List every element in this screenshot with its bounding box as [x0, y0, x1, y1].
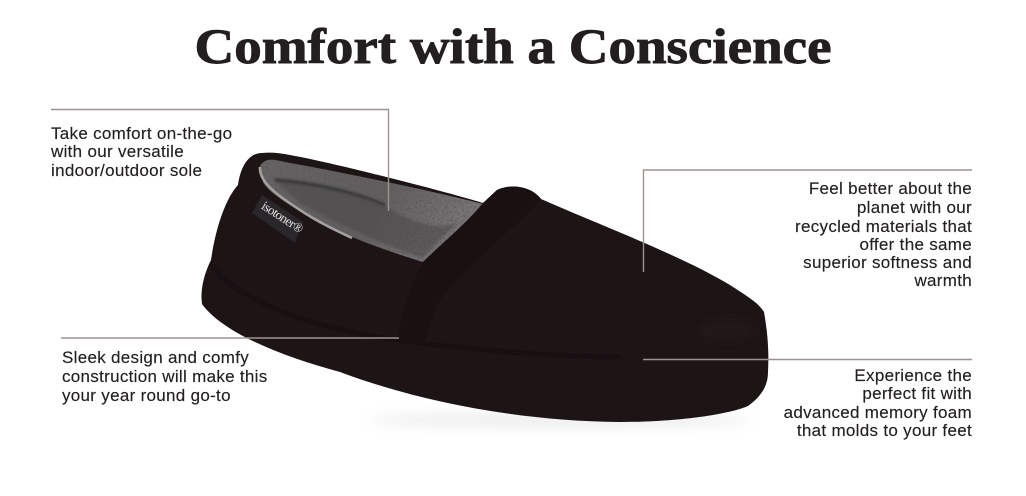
callout: recycled materials: recycled materials that: [795, 217, 972, 236]
callout: memory foam: that molds to your feet: [797, 421, 972, 440]
callout: recycled materials: offer the same: [859, 235, 972, 254]
callout: design: your year round go-to: [62, 386, 231, 405]
grey lining: [260, 160, 483, 262]
callout: sole: [50, 110, 388, 211]
lining light edge: [260, 167, 352, 238]
callout: memory foam: perfect fit with: [862, 384, 972, 403]
callout: sole: indoor/outdoor sole: [51, 161, 202, 180]
brand tag: [252, 195, 307, 243]
callout: recycled materials: Feel better about the: [809, 179, 972, 198]
slipper illustration: [201, 153, 768, 428]
callout: sole: Take comfort on-the-go: [51, 124, 232, 143]
callout: design: construction will make this: [62, 367, 268, 386]
callout: recycled materials: warmth: [913, 271, 972, 290]
sole seam: [212, 264, 620, 357]
brand tag: isotoner®: [259, 198, 307, 236]
callout: recycled materials: planet with our: [857, 198, 972, 217]
callout: recycled materials: superior softness and: [803, 253, 972, 272]
title: Comfort with a Conscience: [194, 18, 832, 74]
callout: design: [61, 338, 399, 405]
callout: memory foam: advanced memory foam: [784, 403, 972, 422]
callout: memory foam: [643, 360, 972, 440]
toe highlight: [700, 318, 760, 343]
callout: recycled materials: [644, 170, 972, 290]
slipper body: [201, 153, 768, 422]
lining fold: [272, 178, 458, 258]
callout: sole: with our versatile: [50, 142, 184, 161]
callout: memory foam: Experience the: [854, 366, 972, 385]
strap: [397, 187, 541, 342]
lining inner shadow: [275, 180, 385, 205]
callout: design: Sleek design and comfy: [62, 348, 249, 367]
